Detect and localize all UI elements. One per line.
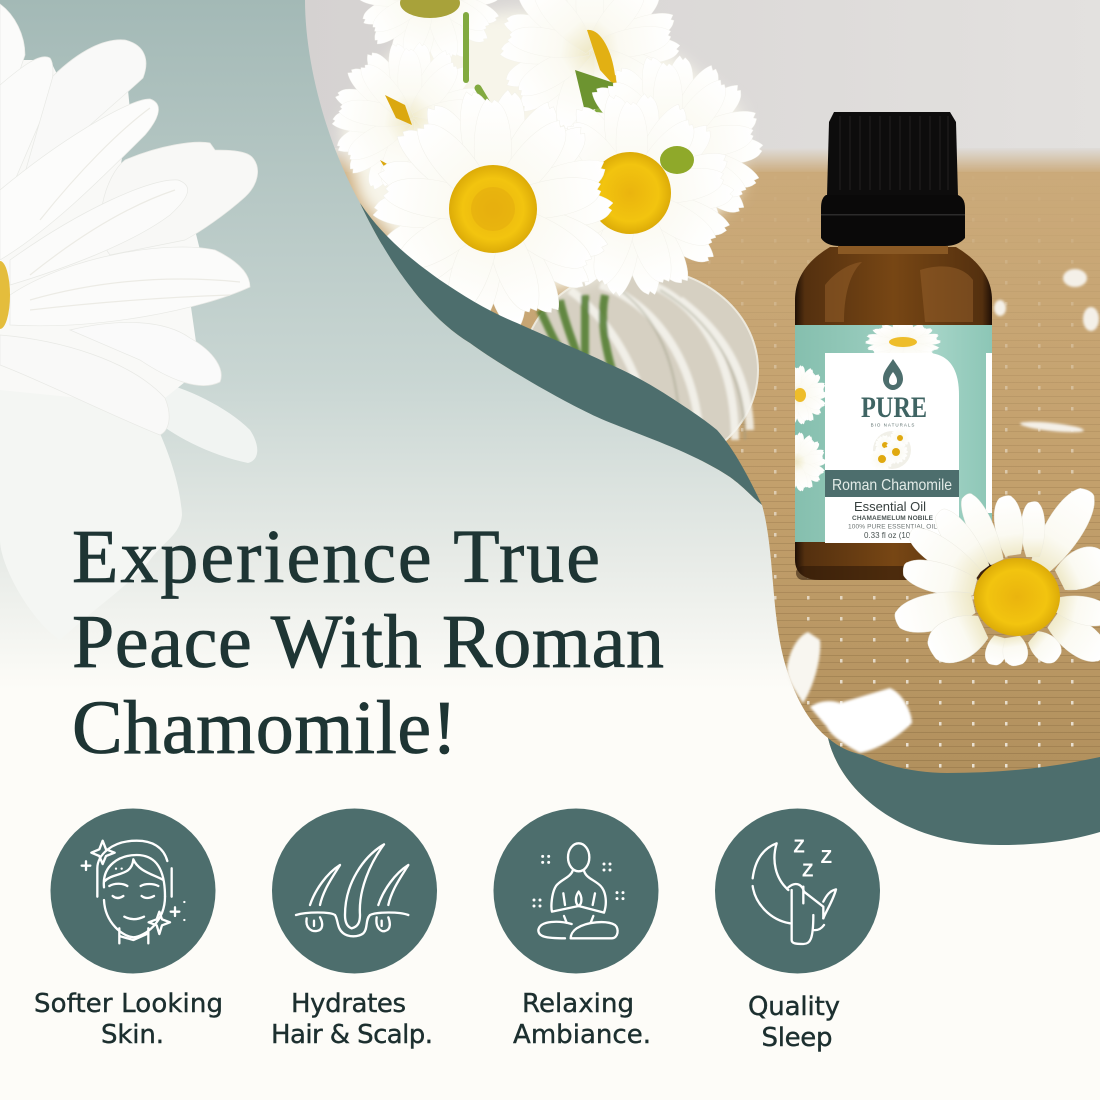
benefit: softer skin: [34, 808, 223, 1050]
teal wave band lower: [828, 738, 1100, 845]
woven table: [300, 172, 1100, 800]
green stems: [466, 15, 606, 148]
fallen petals: [787, 632, 912, 753]
petal base fill: [0, 60, 200, 410]
neck glow: [838, 246, 948, 254]
scattered blurred petals: [994, 269, 1099, 434]
icon circle: sleep: [715, 808, 880, 974]
small bouquet: [870, 428, 911, 471]
icon circle: relax: [494, 808, 658, 974]
photo: table scene: [300, 0, 1100, 800]
cap ribs: [840, 116, 948, 190]
label text: [848, 499, 937, 540]
label: relaxing ambiance: [513, 989, 651, 1050]
cap collar: [821, 195, 965, 246]
wall backdrop: [300, 0, 1100, 150]
benefit: relaxing ambiance: [494, 808, 658, 1050]
label background: [795, 325, 992, 542]
label text: 100% PURE ESSENTIAL OIL: [848, 524, 937, 530]
lower fading petals: [0, 360, 257, 640]
label: hydrates hair: Hydrates: [291, 989, 406, 1019]
icon circle: skin: [50, 808, 216, 974]
bouquet white mass: [340, 10, 740, 290]
icon: glowing face: [82, 841, 184, 943]
flower center sliver: [0, 261, 10, 329]
wall to table blend: [300, 148, 1100, 174]
icon circle: hair: [272, 808, 437, 974]
second daisy: [530, 92, 734, 298]
label: softer skin: Skin.: [101, 1020, 164, 1050]
brand drop logo: [883, 359, 903, 390]
label white panel: [825, 353, 959, 543]
product name banner: Roman Chamomile: [832, 477, 952, 494]
foreground daisy on table: [892, 481, 1100, 671]
label: quality sleep: Sleep: [762, 1023, 832, 1053]
icon: moon and sleep: [753, 835, 836, 944]
title: Chamomile!: [72, 686, 457, 770]
title: Experience True: [72, 515, 600, 599]
benefit: hydrates hair: [271, 808, 437, 1050]
right label panel edge: [986, 353, 992, 513]
benefit: quality sleep: [715, 808, 880, 1053]
main daisy: [373, 88, 613, 330]
brand name: PURE: [861, 391, 927, 424]
icon: meditating person: [532, 843, 624, 938]
teal wave band upper: [360, 203, 762, 505]
label: hydrates hair: Hair & Scalp.: [271, 1020, 433, 1050]
label: quality sleep: [748, 992, 840, 1053]
brand tagline: BIO NATURALS: [871, 422, 915, 428]
product name banner: [825, 470, 959, 497]
glass highlights: [825, 262, 973, 322]
glass vase: [522, 268, 758, 472]
collar groove: [821, 214, 965, 216]
icon: moon and sleep: Z: [802, 859, 813, 880]
title: Peace With Roman: [72, 600, 664, 684]
large daisy left: [0, 4, 258, 640]
label: quality sleep: Quality: [748, 992, 840, 1022]
icon: moon and sleep: Z: [821, 846, 832, 867]
product bottle: [795, 112, 992, 580]
background daisies bouquet: [332, 0, 763, 290]
petal creases: [30, 108, 240, 310]
label flowers: [795, 325, 941, 492]
label: softer skin: [34, 989, 223, 1050]
icon: hair follicles: [296, 844, 408, 936]
label: relaxing ambiance: Relaxing: [522, 989, 634, 1019]
green calyx: [575, 70, 645, 112]
title: [72, 515, 664, 770]
label: relaxing ambiance: Ambiance.: [513, 1020, 651, 1050]
table weave texture: [708, 218, 1100, 768]
label text: 0.33 fl oz (10 ml): [864, 531, 924, 540]
label: hydrates hair: [271, 989, 433, 1050]
bottle base shade: [796, 566, 991, 580]
icon: moon and sleep: Z: [793, 835, 805, 856]
amber glass body: [795, 247, 992, 580]
label: softer skin: Softer Looking: [34, 989, 223, 1019]
label text: Essential Oil: [854, 499, 926, 514]
upper petals: [0, 4, 258, 435]
black cap: [827, 112, 958, 196]
label text: CHAMAEMELUM NOBILE: [852, 515, 934, 522]
